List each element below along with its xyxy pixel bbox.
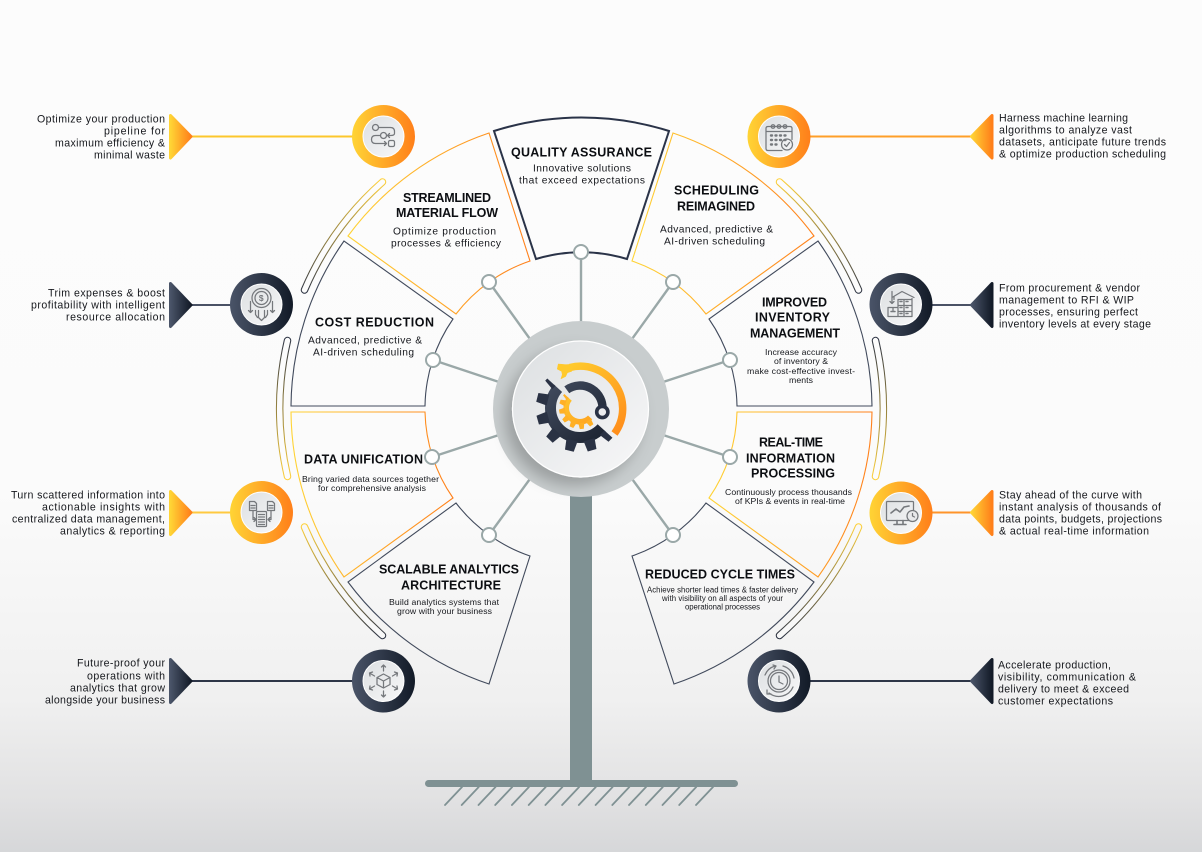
panel: real-time information processing: of KPIs & events in real-time — [735, 496, 845, 506]
text: data unification description: centralized data management, — [12, 514, 165, 526]
text: data unification description — [11, 490, 165, 538]
icon: gear and wrench — [536, 364, 623, 452]
panel: real-time information processing: INFORMATION — [746, 452, 835, 466]
text: scheduling description: Harness machine learning — [999, 112, 1128, 124]
text: streamlined flow description: minimal waste — [94, 150, 165, 162]
panel: improved inventory management: MANAGEMENT — [750, 326, 840, 340]
panel: reduced cycle times: with visibility on all aspects of your — [661, 594, 783, 603]
panel: real-time information processing: Continuously process thousands — [725, 487, 853, 497]
connector: top left — [190, 136, 355, 138]
panel: scalable analytics architecture: grow with your business — [397, 606, 493, 616]
icon: cost savings badge — [230, 273, 293, 336]
connector nodes — [425, 245, 737, 542]
panel: data unification: DATA UNIFICATION — [304, 452, 423, 466]
icon: process flow badge — [352, 105, 415, 168]
panel: streamlined material flow: STREAMLINED — [403, 191, 491, 205]
panel: scheduling reimagined: SCHEDULING — [674, 184, 759, 198]
panel: improved inventory management: INVENTORY — [755, 310, 831, 324]
connector: bottom right — [808, 680, 972, 682]
text: cost description — [31, 288, 165, 324]
text: cycle time description — [998, 660, 1136, 708]
arrow: bottom left — [170, 660, 191, 702]
arrow: upper right — [972, 284, 992, 326]
text: cycle time description: delivery to meet & exceed — [998, 684, 1129, 696]
arrow: upper left — [170, 284, 191, 326]
text: streamlined flow description: pipeline for — [104, 126, 165, 138]
icon: cycle clock badge — [748, 650, 810, 712]
text: real-time description: & actual real-time information — [999, 526, 1149, 538]
panel: streamlined material flow — [348, 133, 530, 314]
text: real-time description: data points, budgets, projections — [999, 514, 1162, 526]
text: scheduling description: algorithms to analyze vast — [999, 124, 1132, 136]
panel: scheduling reimagined: Advanced, predictive & — [660, 224, 773, 236]
panel: quality assurance: QUALITY ASSURANCE — [511, 146, 652, 160]
text: scheduling description: & optimize production scheduling — [999, 148, 1166, 160]
text: data unification description: Turn scattered information into — [11, 490, 165, 502]
panel: improved inventory management: make cost-effective invest- — [747, 366, 855, 376]
panel: scalable analytics architecture: Build analytics systems that — [389, 597, 500, 607]
panel: reduced cycle times: REDUCED CYCLE TIMES — [645, 568, 795, 582]
icon: monitor analytics badge — [870, 482, 932, 544]
text: real-time description: instant analysis of thousands of — [999, 502, 1161, 514]
text: scheduling description: datasets, anticipate future trends — [999, 136, 1166, 148]
connector: lower left — [190, 512, 235, 514]
panel: quality assurance — [494, 118, 669, 259]
connector: lower right — [930, 512, 972, 514]
panel: data unification — [291, 412, 453, 577]
text: cycle time description: visibility, communication & — [998, 672, 1136, 684]
panel: reduced cycle times: operational processes — [685, 603, 760, 612]
text: inventory description: processes, ensuring perfect — [999, 306, 1138, 318]
text: streamlined flow description: Optimize your production — [37, 114, 165, 126]
panel: streamlined material flow: MATERIAL FLOW — [396, 206, 498, 220]
spokes from hub to nodes — [432, 252, 730, 535]
text: inventory description: From procurement & vendor — [999, 282, 1140, 294]
panel: reduced cycle times: Achieve shorter lead times & faster delivery — [647, 586, 798, 595]
panel: streamlined material flow: Optimize production — [393, 226, 496, 238]
text: real-time description: Stay ahead of the curve with — [999, 490, 1142, 502]
panel: quality assurance: that exceed expectations — [519, 176, 645, 186]
panel: scalable analytics architecture — [348, 503, 530, 684]
connector: bottom left — [190, 680, 355, 682]
text: data unification description: actionable insights with — [42, 502, 165, 514]
panel: improved inventory management: Increase accuracy — [765, 347, 838, 357]
connector: upper left — [190, 304, 235, 306]
text: scalable description: Future-proof your — [77, 658, 165, 670]
text: scalable description — [45, 658, 165, 706]
text: cycle time description: Accelerate production, — [998, 660, 1111, 672]
panel: real-time information processing — [709, 412, 872, 577]
panel: real-time information processing: REAL-TIME — [759, 436, 823, 450]
panel: improved inventory management: of inventory & — [774, 356, 828, 366]
arrow: lower left — [170, 492, 191, 534]
panel: quality assurance: Innovative solutions — [533, 164, 631, 174]
panel: cost reduction: Advanced, predictive & — [308, 336, 422, 346]
panel: scalable analytics architecture: ARCHITECTURE — [401, 578, 501, 592]
arrow: bottom right — [972, 660, 992, 702]
panel: improved inventory management — [709, 241, 872, 406]
panel: streamlined material flow: processes & efficiency — [391, 238, 502, 250]
arrow: top right — [972, 116, 992, 158]
text: cycle time description: customer expectations — [998, 696, 1113, 708]
panel: scheduling reimagined: REIMAGINED — [677, 200, 755, 214]
icon: cost savings badge: $ — [259, 293, 264, 303]
panel: data unification: for comprehensive analysis — [318, 483, 427, 493]
panel: cost reduction — [291, 241, 453, 406]
text: inventory description: management to RFI & WIP — [999, 294, 1134, 306]
arrow: lower right — [972, 492, 992, 534]
panel: improved inventory management: IMPROVED — [762, 296, 827, 310]
text: cost description: Trim expenses & boost — [48, 288, 165, 300]
text: streamlined flow description — [37, 114, 165, 162]
central hub — [493, 321, 669, 497]
panel: real-time information processing: PROCESSING — [751, 466, 835, 480]
connector: upper right — [930, 304, 972, 306]
panel: improved inventory management: ments — [789, 375, 814, 385]
text: cost description: profitability with intelligent — [31, 300, 165, 312]
text: scheduling description — [999, 112, 1166, 160]
panel: cost reduction: AI-driven scheduling — [313, 348, 414, 358]
panel: reduced cycle times — [632, 503, 814, 684]
panel: scheduling reimagined — [632, 133, 814, 314]
text: streamlined flow description: maximum efficiency & — [55, 138, 165, 150]
text: scalable description: analytics that grow — [70, 682, 165, 694]
text: inventory description — [999, 282, 1151, 330]
panel: scheduling reimagined: AI-driven scheduling — [664, 236, 765, 248]
icon: warehouse inventory badge — [870, 273, 932, 336]
text: scalable description: operations with — [87, 670, 165, 682]
capsule arcs around the wheel — [280, 182, 883, 636]
icon: scalable cube badge — [352, 650, 415, 712]
text: inventory description: inventory levels at every stage — [999, 318, 1151, 330]
panel: data unification: Bring varied data sources together — [302, 474, 439, 484]
text: scalable description: alongside your business — [45, 694, 165, 706]
icon: data documents badge — [230, 481, 293, 544]
text: data unification description: analytics & reporting — [60, 526, 165, 538]
stand: pole and base — [425, 490, 738, 805]
text: cost description: resource allocation — [66, 312, 165, 324]
text: real-time description — [999, 490, 1162, 538]
icon: calendar badge — [748, 105, 810, 168]
connector: top right — [808, 136, 972, 138]
arrow: top left — [170, 116, 191, 158]
panel: scalable analytics architecture: SCALABLE ANALYTICS — [379, 562, 519, 576]
panel: cost reduction: COST REDUCTION — [315, 316, 434, 330]
